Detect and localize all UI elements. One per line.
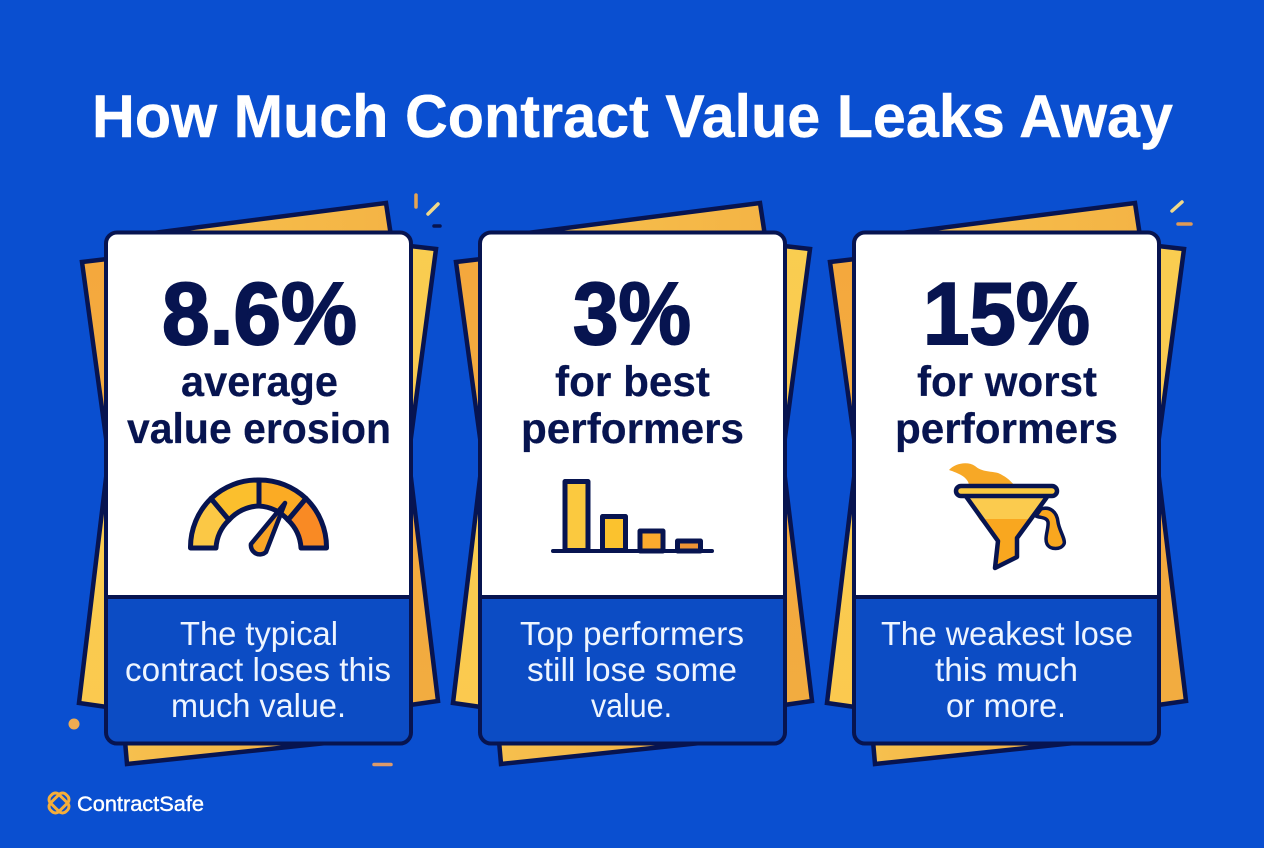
label: value erosion <box>127 405 391 453</box>
footer text <box>520 615 744 724</box>
icon: logo mark <box>47 791 71 815</box>
footer text: Top performers <box>520 615 744 652</box>
footer text <box>125 615 391 724</box>
footer text: still lose some <box>527 651 737 688</box>
icon: bar chart <box>553 482 712 551</box>
footer text <box>881 615 1133 724</box>
icon: leaking funnel <box>949 463 1064 568</box>
logo <box>47 791 204 816</box>
footer text: or more. <box>946 687 1066 724</box>
label: average <box>181 358 338 406</box>
back sheets <box>453 203 812 764</box>
label: for worst <box>917 358 1097 406</box>
card <box>480 232 785 744</box>
decorative accents <box>68 195 1191 764</box>
panel: best performers <box>453 203 812 764</box>
statistic: 8.6% <box>162 264 357 363</box>
card <box>106 232 411 744</box>
label: performers <box>895 405 1118 453</box>
footer text: The typical <box>180 615 338 652</box>
panel: average value erosion <box>79 203 438 764</box>
footer text: this much <box>935 651 1078 688</box>
footer text: The weakest lose <box>881 615 1133 652</box>
back sheets <box>827 203 1186 764</box>
title: How Much Contract Value Leaks Away <box>92 83 1174 150</box>
label: performers <box>521 405 744 453</box>
label <box>127 358 391 453</box>
card <box>854 232 1159 744</box>
brand name: ContractSafe <box>77 793 204 816</box>
back sheets <box>79 203 438 764</box>
label <box>521 358 744 453</box>
label: for best <box>555 358 710 406</box>
icon: gauge <box>190 480 327 554</box>
statistic: 3% <box>573 264 691 363</box>
footer text: much value. <box>171 687 346 724</box>
footer text: value. <box>591 687 672 724</box>
panel: worst performers <box>827 203 1186 764</box>
statistic: 15% <box>923 264 1090 363</box>
footer text: contract loses this <box>125 651 391 688</box>
label <box>895 358 1118 453</box>
